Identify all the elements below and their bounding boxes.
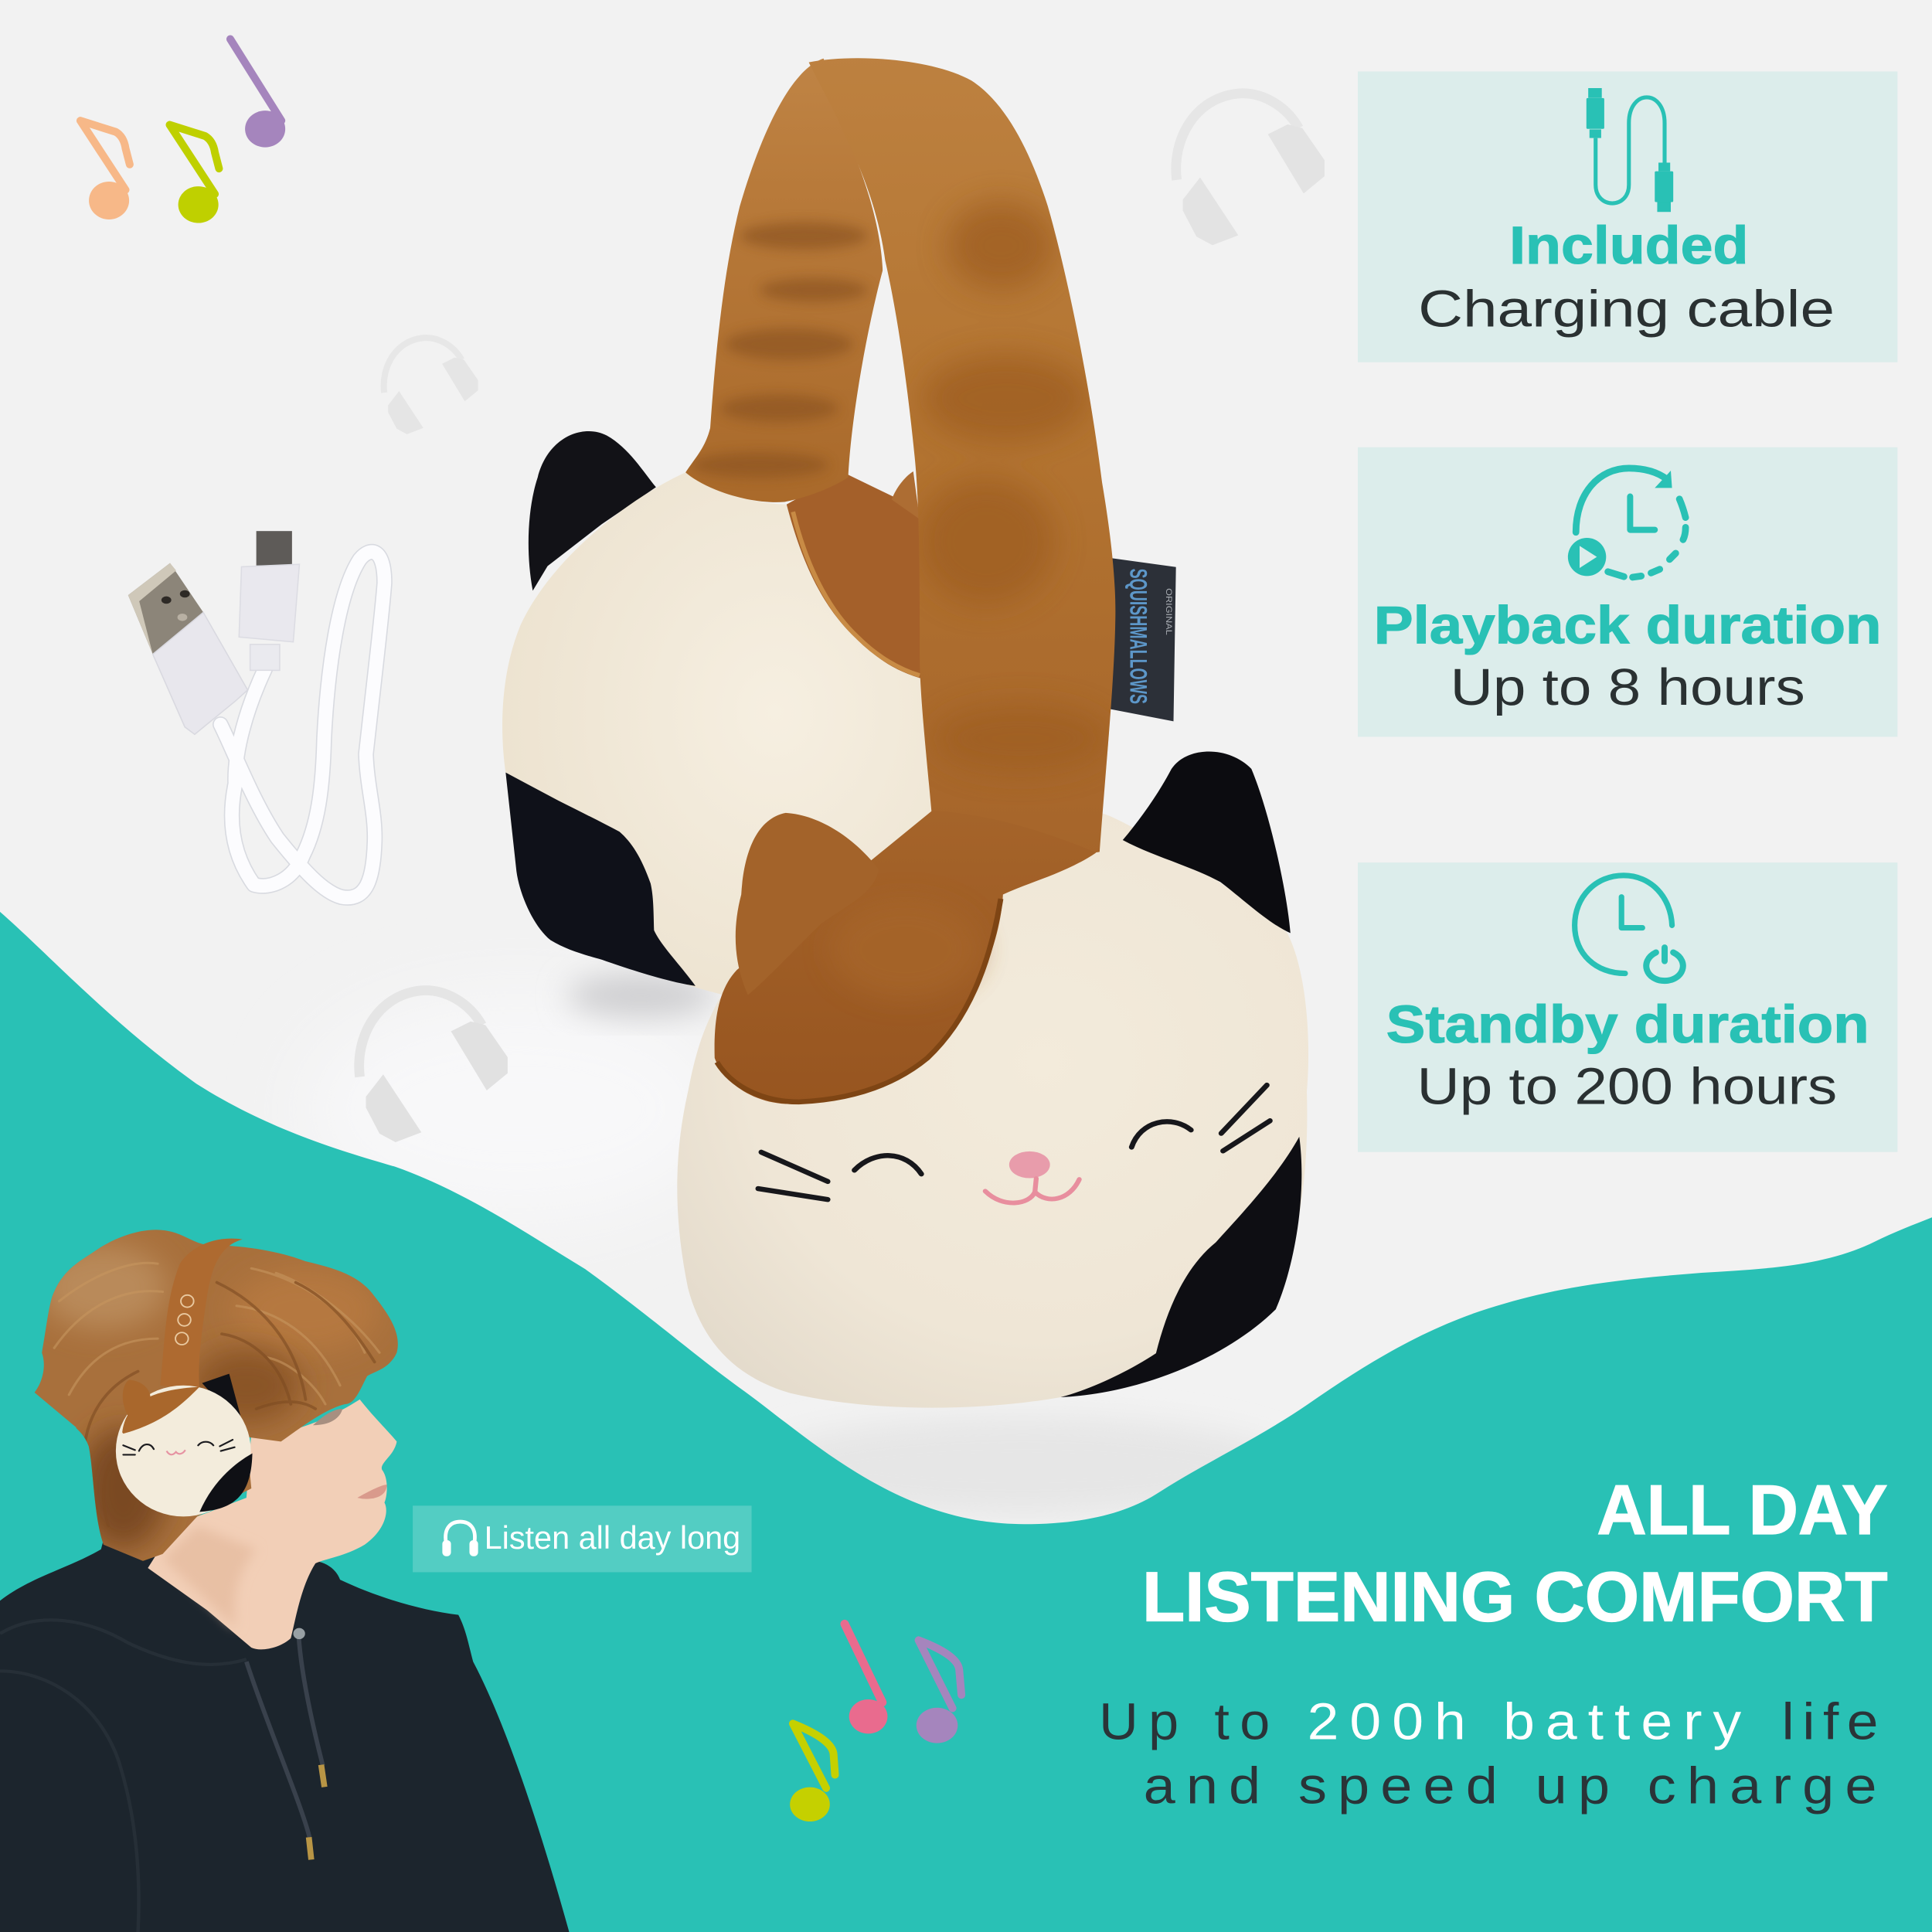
USB-A white housing bbox=[153, 612, 247, 734]
note: purple bbox=[917, 1640, 961, 1743]
note: purple bbox=[230, 39, 285, 148]
small plush cream body bbox=[116, 1386, 251, 1516]
small plush mouth bbox=[167, 1450, 185, 1454]
headline bbox=[1142, 1471, 1888, 1636]
USB-A contacts bbox=[162, 590, 190, 621]
right whiskers bbox=[1221, 1085, 1267, 1134]
heading: Included bbox=[1509, 216, 1748, 275]
front brown ear bbox=[736, 813, 879, 995]
front limb of band bbox=[808, 58, 1116, 853]
skin face and neck bbox=[148, 1400, 396, 1649]
eyelet bbox=[293, 1628, 305, 1639]
teal wave background bbox=[0, 912, 1932, 1932]
drawstring two bbox=[247, 1662, 310, 1837]
heading: Standby duration bbox=[1386, 995, 1869, 1054]
front headband bbox=[675, 49, 1176, 886]
headband small bbox=[160, 1239, 243, 1390]
icon: cable bbox=[1587, 88, 1673, 212]
lips bbox=[357, 1485, 387, 1499]
patch seam bbox=[717, 899, 1001, 1102]
back small brown ear bbox=[892, 471, 920, 519]
front cream body bbox=[677, 811, 1308, 1408]
note: pink bbox=[845, 1624, 887, 1733]
hair bbox=[34, 1230, 398, 1561]
subheading: life: life bbox=[1781, 1692, 1886, 1750]
back limb of band bbox=[685, 59, 883, 502]
subheading: second line: and speed up charge bbox=[1144, 1757, 1888, 1815]
decorative music notes top left bbox=[80, 39, 285, 223]
panel: included charging cable bbox=[1358, 71, 1897, 362]
front black lower patch bbox=[1060, 1137, 1301, 1397]
tag small text: ORIGINAL bbox=[1164, 588, 1173, 635]
plush headphones product photo bbox=[502, 49, 1308, 1408]
back brown patch bbox=[787, 472, 924, 679]
ghost headphones top bbox=[1176, 94, 1325, 245]
subheading: battery life highlight: 200h battery bbox=[1308, 1692, 1752, 1750]
micro USB neck bbox=[250, 645, 280, 670]
back ear muff bbox=[502, 431, 957, 1005]
subheading bbox=[1099, 1692, 1888, 1815]
small plush black patch bbox=[199, 1454, 253, 1512]
small plush face bbox=[123, 1440, 235, 1454]
subheading: up to: Up to bbox=[1099, 1692, 1281, 1750]
tag on headband bbox=[1104, 557, 1176, 721]
eye bbox=[313, 1409, 342, 1425]
right eye bbox=[1131, 1121, 1191, 1147]
headline line one: ALL DAY bbox=[1597, 1471, 1888, 1549]
icon: standby clock bbox=[1575, 876, 1683, 981]
ghost headphones lower bbox=[359, 991, 508, 1142]
caption text: Listen all day long bbox=[485, 1519, 740, 1556]
drawstring one bbox=[298, 1636, 323, 1766]
front muff details bbox=[715, 752, 1301, 1397]
panel: standby duration bbox=[1358, 862, 1897, 1152]
body text: Charging cable bbox=[1418, 281, 1835, 338]
left eye bbox=[855, 1155, 921, 1174]
patch highlight bbox=[830, 899, 981, 999]
left whiskers bbox=[758, 1085, 1270, 1199]
caption tag: listen all day long bbox=[413, 1505, 752, 1572]
pink mouth bbox=[985, 1179, 1080, 1203]
icon: playback clock bbox=[1568, 468, 1685, 577]
back black ear bbox=[529, 431, 656, 590]
back black lower patch bbox=[505, 773, 696, 986]
ghost headphones small bbox=[384, 338, 478, 434]
neck shadow bbox=[162, 1526, 257, 1629]
icon: headphones bbox=[442, 1522, 478, 1556]
hoodie folds bbox=[0, 1620, 247, 1932]
back cream body bbox=[502, 472, 957, 1005]
gold tip one bbox=[318, 1764, 328, 1787]
heading: Playback duration bbox=[1374, 595, 1882, 655]
note: lime bbox=[790, 1723, 835, 1821]
tag brand text: SQUISHMALLOWS bbox=[1124, 569, 1152, 704]
USB-A metal plug bbox=[128, 563, 203, 655]
back seam bbox=[793, 512, 920, 675]
hair strands bbox=[53, 1262, 381, 1442]
small plush brown ear bbox=[123, 1379, 151, 1418]
body text: Up to 200 hours bbox=[1417, 1058, 1837, 1116]
note: orange bbox=[80, 121, 130, 219]
pink nose bbox=[1009, 1151, 1050, 1179]
headline line two: LISTENING COMFORT bbox=[1142, 1558, 1888, 1636]
floor highlights and shadows bbox=[308, 974, 1294, 1515]
panel: playback duration bbox=[1358, 447, 1897, 736]
headband buttons bbox=[175, 1295, 194, 1345]
body text: Up to 8 hours bbox=[1451, 658, 1805, 716]
small plush black ear bbox=[202, 1374, 240, 1416]
music notes lower bbox=[790, 1624, 961, 1821]
small plush brown patch bbox=[122, 1387, 199, 1434]
front black ear bbox=[1123, 752, 1291, 933]
micro USB white housing bbox=[239, 564, 299, 642]
front brown patch bbox=[715, 811, 1096, 1104]
micro USB metal plug bbox=[257, 531, 292, 566]
note: lime bbox=[170, 125, 219, 223]
cable cord bbox=[220, 552, 384, 898]
gold tip two bbox=[306, 1837, 315, 1860]
USB charging cable photo bbox=[128, 531, 384, 898]
person wearing headphones photo bbox=[0, 1222, 570, 1932]
hoodie bbox=[0, 1540, 570, 1932]
